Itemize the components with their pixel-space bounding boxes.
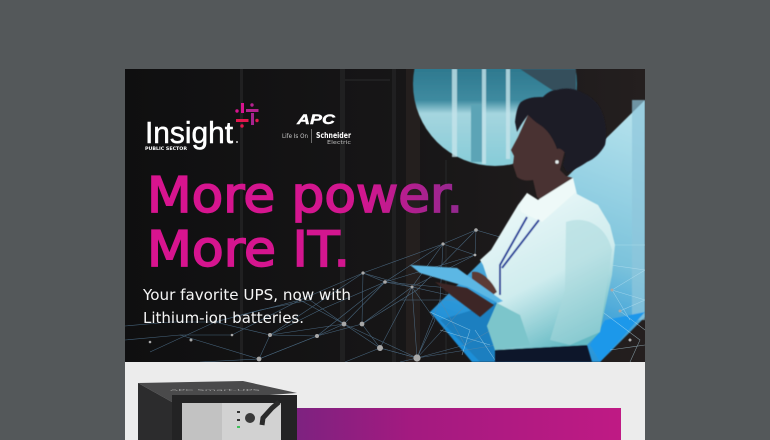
logo: Insight: Insight — [145, 115, 233, 150]
logo: APC Schneider Electric: Electric — [327, 140, 351, 146]
logo: Insight — [145, 103, 259, 152]
lanyard — [500, 217, 539, 295]
logo: APC Schneider Electric: APC — [296, 111, 336, 127]
illustration: woman with tablet — [410, 89, 615, 362]
panel: hero banner — [125, 69, 645, 362]
neck and face — [511, 115, 573, 206]
illustration: UPS unit: APC Smart-UPS — [170, 388, 261, 392]
cuff — [487, 303, 530, 350]
chart: network mesh — [125, 228, 645, 362]
title: More power. — [147, 167, 463, 224]
illustration: UPS unit — [138, 381, 297, 440]
subtitle: Lithium-ion batteries. — [143, 309, 304, 327]
tablet — [410, 265, 503, 303]
right sleeve shade — [550, 220, 612, 345]
collar — [524, 178, 575, 222]
logo: APC Schneider Electric: Schneider — [316, 131, 351, 140]
photo: blue diamond server aisle — [430, 100, 645, 362]
infographic canvas — [125, 69, 645, 440]
earring — [555, 160, 559, 164]
photo: circle server aisle — [412, 69, 578, 167]
dark trousers — [495, 345, 592, 362]
subtitle: Your favorite UPS, now with — [142, 286, 351, 304]
hair — [515, 89, 606, 172]
lower hand — [435, 282, 494, 317]
logo: APC Schneider Electric — [282, 114, 352, 144]
title — [151, 175, 458, 268]
logo: Insight: PUBLIC SECTOR — [145, 146, 188, 152]
upper hand — [472, 272, 497, 297]
icon: Insight mark — [235, 103, 259, 128]
title: More IT. — [147, 221, 350, 278]
white shirt — [480, 178, 615, 350]
gradient banner — [296, 408, 621, 440]
subtitle — [143, 288, 350, 323]
logo: APC Schneider Electric: Life Is On — [282, 132, 308, 140]
panel: lower light section — [125, 362, 645, 440]
